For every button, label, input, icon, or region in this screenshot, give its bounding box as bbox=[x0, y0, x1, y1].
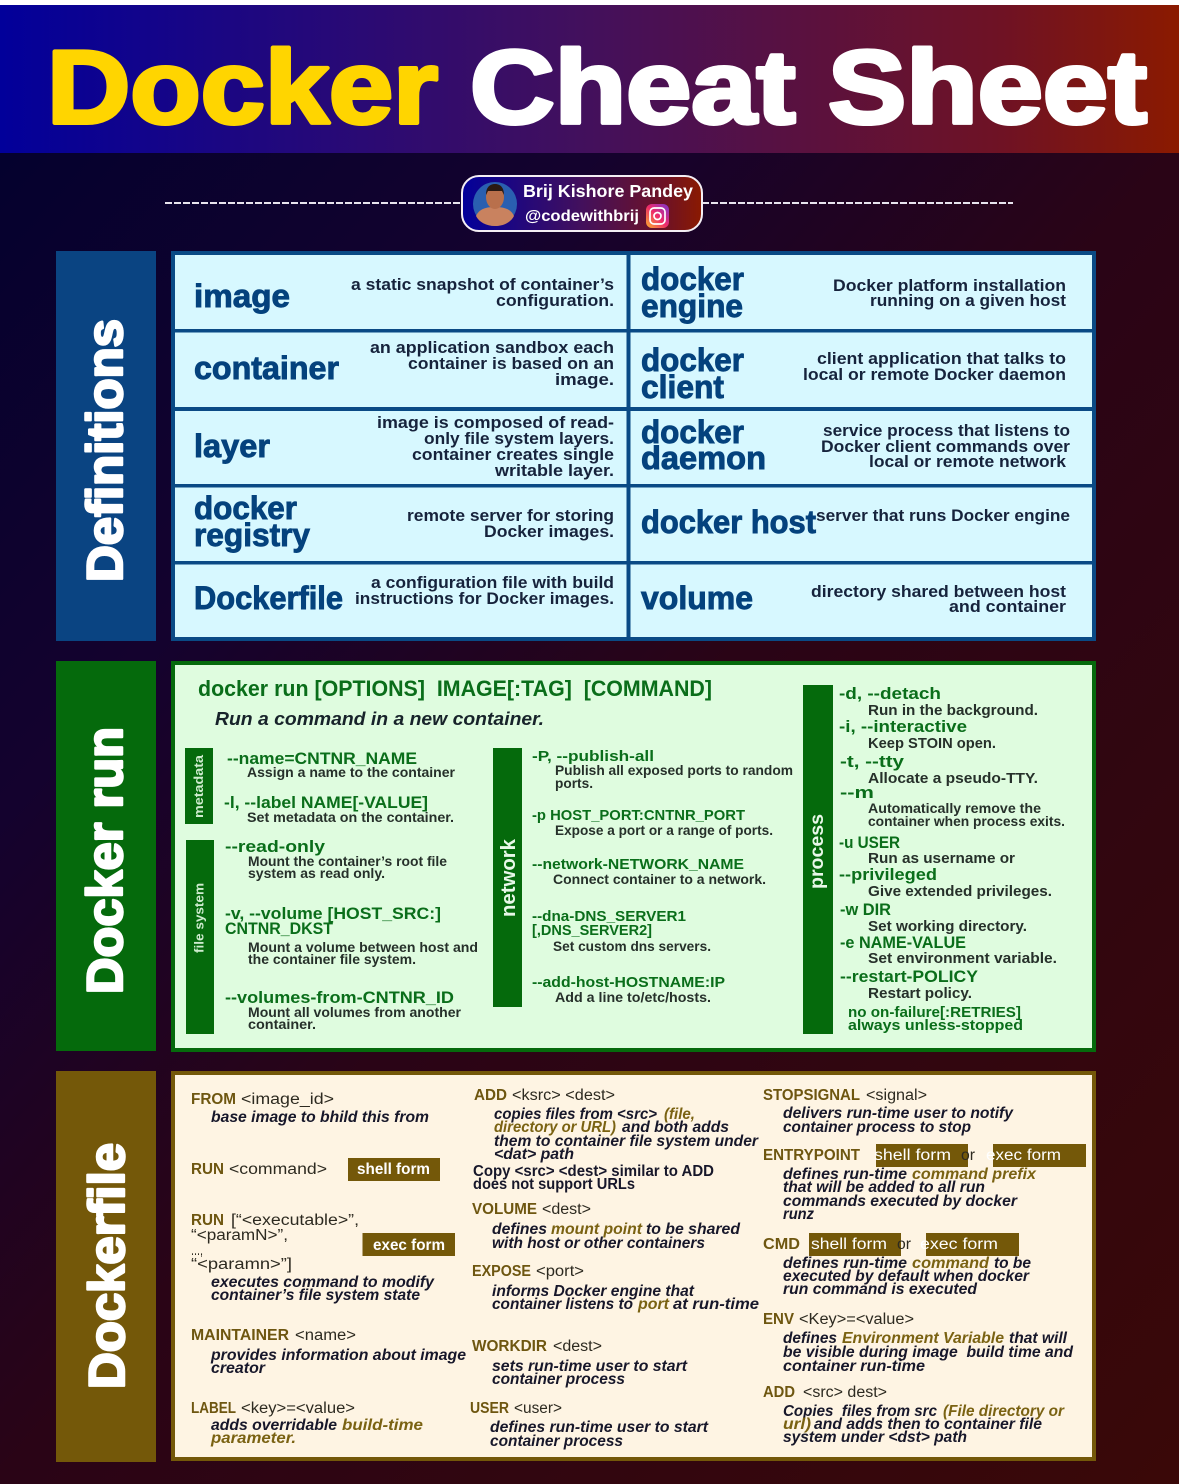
definition: image: configuration. bbox=[496, 291, 614, 310]
definition: layer: image is composed of read- bbox=[377, 413, 614, 432]
directive: VOLUME bbox=[472, 1201, 741, 1252]
category tab: process: process bbox=[807, 814, 828, 889]
option: network: Connect container to a network. bbox=[553, 871, 766, 887]
directive: ADD and COPY: (file, bbox=[664, 1106, 695, 1123]
option: tty: Allocate a pseudo-TTY. bbox=[868, 770, 1038, 787]
category tab: network bbox=[493, 748, 522, 1007]
directive: STOPSIGNAL bbox=[763, 1087, 1014, 1136]
directive: FROM: FROM bbox=[191, 1091, 236, 1108]
directive: LABEL: LABEL bbox=[191, 1400, 236, 1417]
directive: RUN shell form bbox=[191, 1158, 440, 1181]
option: name: Assign a name to the container bbox=[247, 764, 456, 780]
directive: USER: <user> bbox=[514, 1400, 562, 1417]
option: privileged: Give extended privileges. bbox=[868, 883, 1052, 900]
definitions table frame bbox=[171, 251, 1096, 641]
header banner with title: Cheat Sheet bbox=[470, 30, 1147, 146]
definition: docker client: client bbox=[641, 369, 724, 405]
directive: CMD bbox=[763, 1233, 1031, 1298]
option: read-only: system as read only. bbox=[248, 865, 385, 881]
category tab: metadata: metadata bbox=[192, 754, 206, 818]
directive: ENTRYPOINT bbox=[763, 1144, 1086, 1223]
directive: WORKDIR: WORKDIR bbox=[472, 1338, 547, 1355]
option: volumes-from bbox=[225, 989, 462, 1032]
option: restart: --restart-POLICY bbox=[840, 968, 978, 986]
directive: ENTRYPOINT: command prefix bbox=[912, 1166, 1037, 1183]
directive: ADD and COPY: Copy <src> <dest> similar to ADD bbox=[473, 1163, 714, 1180]
option: dns bbox=[532, 908, 711, 954]
directive: RUN shell form: <command> bbox=[229, 1161, 327, 1178]
option: publish bbox=[532, 807, 773, 838]
directive: ADD (second) bbox=[763, 1384, 1065, 1446]
definition: docker registry bbox=[194, 490, 614, 553]
option: volume: Mount a volume between host and bbox=[248, 939, 478, 955]
header banner with title: Docker bbox=[47, 30, 438, 146]
definition: Dockerfile: a configuration file with build bbox=[371, 573, 614, 592]
definition: docker daemon: local or remote network bbox=[869, 452, 1067, 471]
category tab: process bbox=[803, 685, 833, 1034]
directive: ADD (second): ADD bbox=[763, 1384, 795, 1401]
panel: docker run bbox=[56, 661, 1094, 1051]
option: label: -l, --label NAME[-VALUE] bbox=[224, 794, 428, 812]
option: interactive: -i, --interactive bbox=[839, 718, 967, 736]
directive: ENV: container run-time bbox=[783, 1358, 925, 1375]
directive: EXPOSE: <port> bbox=[536, 1263, 584, 1280]
directive: EXPOSE: container listens to bbox=[492, 1296, 633, 1313]
definition: layer bbox=[194, 413, 614, 480]
directive: FROM bbox=[191, 1091, 429, 1126]
author badge: @codewithbrij bbox=[525, 208, 639, 225]
directive: CMD: exec form bbox=[920, 1236, 998, 1253]
option: rm: --m bbox=[840, 784, 874, 802]
directive: FROM: <image_id> bbox=[241, 1091, 334, 1108]
section tab: Dockerfile: Dockerfile bbox=[79, 1143, 135, 1389]
directive: USER bbox=[470, 1400, 709, 1450]
option: interactive: Keep STOIN open. bbox=[868, 735, 996, 752]
directive: WORKDIR: <dest> bbox=[553, 1338, 602, 1355]
option: volumes-from: Mount all volumes from another bbox=[248, 1004, 462, 1020]
definition: volume: directory shared between host bbox=[811, 582, 1066, 601]
directive: RUN exec form: “<paramN>”, bbox=[191, 1227, 288, 1244]
option: privileged: --privileged bbox=[839, 866, 937, 884]
directive: EXPOSE: port bbox=[637, 1296, 670, 1313]
definition: docker engine: docker bbox=[641, 261, 744, 297]
option: label: Set metadata on the container. bbox=[247, 809, 454, 825]
definition: layer: only file system layers. bbox=[424, 429, 614, 448]
option: detach: -d, --detach bbox=[839, 685, 941, 703]
directive: MAINTAINER: provides information about image bbox=[210, 1347, 466, 1364]
option: workdir: -w DIR bbox=[840, 901, 891, 919]
directive: STOPSIGNAL: STOPSIGNAL bbox=[763, 1087, 860, 1104]
directive: LABEL: <key>=<value> bbox=[241, 1400, 355, 1417]
option: volume bbox=[225, 905, 478, 967]
definition: docker client: local or remote Docker daemon bbox=[803, 365, 1066, 384]
definition: layer: writable layer. bbox=[494, 461, 614, 480]
directive: ENTRYPOINT: runz bbox=[783, 1206, 814, 1223]
option: workdir bbox=[840, 901, 1027, 935]
definition: image bbox=[194, 275, 614, 314]
directive: ADD and COPY: directory or URL) bbox=[494, 1119, 616, 1136]
directive: ENTRYPOINT: defines run-time bbox=[783, 1166, 907, 1183]
definition: volume bbox=[641, 580, 1066, 616]
directive: RUN exec form: “<paramn>”] bbox=[191, 1256, 292, 1273]
directive: VOLUME: mount point bbox=[551, 1221, 643, 1238]
directive: STOPSIGNAL: delivers run-time user to notify bbox=[783, 1105, 1014, 1122]
category tab: file system: file system bbox=[192, 883, 206, 953]
option: restart: always unless-stopped bbox=[848, 1017, 1023, 1034]
directive: ENV: defines bbox=[783, 1330, 837, 1347]
option: privileged bbox=[839, 866, 1052, 900]
definition: docker host: docker host bbox=[641, 504, 816, 540]
option: name bbox=[227, 750, 456, 780]
directive: ENTRYPOINT: commands executed by docker bbox=[783, 1193, 1018, 1210]
option: env: -e NAME-VALUE bbox=[840, 934, 966, 952]
directive: STOPSIGNAL: container process to stop bbox=[783, 1119, 971, 1136]
definition: image: a static snapshot of container’s bbox=[351, 275, 614, 294]
directive: ADD and COPY: ADD bbox=[474, 1087, 507, 1104]
panel: dockerfile bbox=[56, 1071, 1094, 1462]
directive: RUN shell form: RUN bbox=[191, 1161, 224, 1178]
directive: VOLUME: with host or other containers bbox=[492, 1235, 705, 1252]
option: publish-all: -P, --publish-all bbox=[532, 748, 654, 765]
directive: FROM: base image to bhild this from bbox=[211, 1109, 429, 1126]
definition: layer: layer bbox=[194, 428, 270, 464]
directive: ENTRYPOINT: ENTRYPOINT bbox=[763, 1147, 861, 1164]
option: name: --name=CNTNR_NAME bbox=[227, 750, 417, 768]
option: user bbox=[839, 834, 1015, 867]
directive: USER: defines run-time user to start bbox=[490, 1419, 709, 1436]
definition: docker registry: registry bbox=[194, 517, 310, 553]
directive: WORKDIR: sets run-time user to start bbox=[492, 1358, 688, 1375]
definition: container: an application sandbox each bbox=[370, 338, 614, 357]
directive: ENV: ENV bbox=[763, 1311, 795, 1328]
option: add-host: Add a line to/etc/hosts. bbox=[555, 989, 711, 1005]
directive: USER: USER bbox=[470, 1400, 509, 1417]
option: restart bbox=[840, 968, 1023, 1034]
directive: ADD and COPY: <ksrc> <dest> bbox=[512, 1087, 615, 1104]
definition: container: image. bbox=[555, 370, 614, 389]
option: network bbox=[532, 856, 766, 887]
panel: definitions bbox=[56, 251, 1096, 641]
directive: CMD: run command is executed bbox=[783, 1281, 978, 1298]
option: restart: no on-failure[:RETRIES] bbox=[848, 1004, 1021, 1021]
directive: ENTRYPOINT: exec form bbox=[986, 1147, 1061, 1164]
directive: RUN shell form: shell form bbox=[357, 1161, 430, 1178]
option: dns: [,DNS_SERVER2] bbox=[532, 922, 652, 939]
category tab: file system bbox=[186, 840, 214, 1034]
definition: Dockerfile: instructions for Docker images. bbox=[355, 589, 614, 608]
option: read-only bbox=[225, 838, 447, 881]
definition: docker engine bbox=[641, 261, 1066, 324]
option: publish-all bbox=[532, 748, 793, 791]
directive: VOLUME: <dest> bbox=[542, 1201, 591, 1218]
definition: docker host bbox=[641, 504, 1070, 540]
definition: docker registry: Docker images. bbox=[484, 522, 614, 541]
definition: docker daemon: Docker client commands over bbox=[821, 437, 1070, 456]
directive: EXPOSE: EXPOSE bbox=[472, 1263, 531, 1280]
definition: docker registry: docker bbox=[194, 490, 297, 526]
option: dns: --dna-DNS_SERVER1 bbox=[532, 908, 686, 925]
section tab: Definitions bbox=[56, 251, 156, 641]
directive: MAINTAINER bbox=[191, 1327, 466, 1377]
option: interactive bbox=[839, 718, 996, 752]
directive: LABEL bbox=[191, 1400, 423, 1447]
option: user: Run as username or bbox=[868, 850, 1015, 867]
definition: layer: container creates single bbox=[412, 445, 614, 464]
command description: Run a command in a new container. bbox=[215, 708, 544, 729]
option: rm: Automatically remove the bbox=[868, 800, 1041, 816]
option: workdir: Set working directory. bbox=[868, 918, 1027, 935]
directive: LABEL: adds overridable bbox=[211, 1417, 337, 1434]
directive: LABEL: parameter. bbox=[210, 1430, 296, 1447]
directive: MAINTAINER: <name> bbox=[295, 1327, 356, 1344]
directive: ADD and COPY: and both adds bbox=[622, 1119, 729, 1136]
directive: WORKDIR bbox=[472, 1338, 688, 1388]
definition: docker client: client application that talks to bbox=[817, 349, 1066, 368]
author badge: Brij Kishore Pandey bbox=[523, 181, 693, 201]
option: label bbox=[224, 794, 454, 825]
definition: docker daemon bbox=[641, 414, 1070, 476]
option: read-only: --read-only bbox=[225, 838, 326, 856]
definition: docker client bbox=[641, 342, 1066, 405]
definition: docker registry: remote server for storing bbox=[407, 506, 614, 525]
definition: volume: and container bbox=[949, 597, 1066, 616]
directive: ADD and COPY: does not support URLs bbox=[473, 1176, 635, 1193]
definition: docker engine: Docker platform installation bbox=[833, 276, 1066, 295]
option: rm: container when process exits. bbox=[868, 813, 1065, 829]
section tab: Docker run bbox=[56, 661, 156, 1051]
directive: VOLUME: to be shared bbox=[646, 1221, 741, 1238]
directive: CMD: command bbox=[912, 1255, 990, 1272]
directive: RUN exec form: RUN bbox=[191, 1212, 224, 1229]
directive: RUN exec form: exec form bbox=[373, 1237, 445, 1254]
option: publish: Expose a port or a range of ports. bbox=[555, 822, 773, 838]
directive: ENTRYPOINT: that will be added to all run bbox=[783, 1179, 985, 1196]
section tab: Dockerfile bbox=[56, 1071, 156, 1462]
directive: RUN exec form: [“<executable>”, bbox=[231, 1212, 359, 1229]
definition: docker engine: running on a given host bbox=[870, 291, 1066, 310]
directive: ENV: <Key>=<value> bbox=[799, 1311, 914, 1328]
option: volumes-from: container. bbox=[248, 1016, 316, 1032]
directive: EXPOSE: at run-time bbox=[673, 1296, 759, 1313]
directive: CMD: executed by default when docker bbox=[783, 1268, 1030, 1285]
definition: docker host: server that runs Docker engine bbox=[816, 506, 1070, 525]
directive: ENV bbox=[763, 1311, 1074, 1375]
option: tty bbox=[840, 753, 1038, 787]
option: env: Set environment variable. bbox=[868, 950, 1057, 967]
directive: ADD (second): (File directory or bbox=[943, 1403, 1065, 1420]
docker run frame bbox=[173, 663, 1094, 1050]
directive: ADD (second): system under <dst> path bbox=[783, 1429, 967, 1446]
option: read-only: Mount the container’s root file bbox=[248, 853, 447, 869]
option: publish-all: Publish all exposed ports to random bbox=[555, 762, 793, 778]
directive: VOLUME: defines bbox=[492, 1221, 547, 1238]
directive: CMD: or bbox=[897, 1236, 911, 1253]
option: dns: Set custom dns servers. bbox=[553, 938, 711, 954]
definition: container: container is based on an bbox=[408, 354, 614, 373]
option: restart: Restart policy. bbox=[868, 985, 972, 1002]
directive: RUN exec form: executes command to modify bbox=[211, 1274, 435, 1291]
definition: docker engine: engine bbox=[641, 288, 743, 324]
command syntax heading: docker run [OPTIONS] IMAGE[:TAG] [COMMAND] bbox=[198, 676, 712, 701]
author badge bbox=[165, 176, 1013, 231]
directive: ENV: that will bbox=[1009, 1330, 1068, 1347]
definition: volume: volume bbox=[641, 580, 753, 616]
directive: MAINTAINER: creator bbox=[211, 1360, 266, 1377]
definition: docker client: docker bbox=[641, 342, 744, 378]
directive: VOLUME: VOLUME bbox=[472, 1201, 537, 1218]
directive: RUN exec form bbox=[191, 1212, 455, 1304]
directive: ENV: Environment Variable bbox=[842, 1330, 1004, 1347]
directive: ADD (second): and adds then to container file bbox=[814, 1416, 1042, 1433]
directive: RUN exec form: container’s file system state bbox=[211, 1287, 420, 1304]
option: detach bbox=[839, 685, 1038, 719]
definition: docker daemon: docker bbox=[641, 414, 744, 450]
option: add-host bbox=[532, 974, 725, 1005]
directive: EXPOSE: informs Docker engine that bbox=[492, 1283, 695, 1300]
directive: ADD and COPY: <dat> path bbox=[494, 1146, 574, 1163]
directive: ADD (second): <src> dest> bbox=[803, 1384, 887, 1401]
definition: Dockerfile: Dockerfile bbox=[194, 580, 343, 616]
option: publish-all: ports. bbox=[555, 775, 593, 791]
directive: RUN exec form: ..., bbox=[191, 1242, 203, 1259]
directive: ADD (second): url) bbox=[783, 1416, 811, 1433]
dockerfile frame bbox=[173, 1073, 1094, 1459]
directive: CMD: shell form bbox=[811, 1236, 887, 1253]
definition: docker daemon: service process that listens to bbox=[823, 421, 1070, 440]
option: volumes-from: --volumes-from-CNTNR_ID bbox=[225, 989, 454, 1007]
directive: LABEL: build-time bbox=[342, 1417, 423, 1434]
directive: ENTRYPOINT: shell form bbox=[874, 1147, 951, 1164]
option: env bbox=[840, 934, 1057, 967]
header banner with title bbox=[0, 5, 1179, 153]
directive: CMD: defines run-time bbox=[783, 1255, 907, 1272]
directive: CMD: to be bbox=[994, 1255, 1031, 1272]
category tab: metadata bbox=[185, 748, 213, 824]
directive: EXPOSE bbox=[472, 1263, 759, 1313]
directive: WORKDIR: container process bbox=[492, 1371, 625, 1388]
section tab: Docker run: Docker run bbox=[77, 727, 133, 994]
definition: image: image bbox=[194, 278, 290, 314]
directive: USER: container process bbox=[490, 1433, 623, 1450]
directive: ENV: be visible during image build time and bbox=[783, 1344, 1074, 1361]
option: volume: -v, --volume [HOST_SRC:] bbox=[225, 905, 441, 923]
option: volume: CNTNR_DKST bbox=[225, 920, 333, 938]
directive: ADD and COPY: them to container file system under bbox=[494, 1133, 759, 1150]
directive: ADD and COPY bbox=[473, 1087, 759, 1193]
directive: CMD: CMD bbox=[763, 1236, 800, 1253]
directive: ADD (second): Copies files from src bbox=[783, 1403, 937, 1420]
option: rm bbox=[840, 784, 1065, 829]
category tab: network: network bbox=[498, 838, 520, 917]
section tab: Definitions: Definitions bbox=[77, 319, 133, 582]
option: add-host: --add-host-HOSTNAME:IP bbox=[532, 974, 725, 991]
definition: docker daemon: daemon bbox=[641, 440, 766, 476]
option: detach: Run in the background. bbox=[868, 702, 1038, 719]
option: tty: -t, --tty bbox=[840, 753, 905, 771]
option: network: --network-NETWORK_NAME bbox=[532, 856, 744, 873]
option: user: -u USER bbox=[839, 834, 900, 852]
directive: STOPSIGNAL: <signal> bbox=[866, 1087, 927, 1104]
definition: Dockerfile bbox=[194, 573, 614, 616]
directive: ADD and COPY: copies files from <src> bbox=[494, 1106, 657, 1123]
option: volume: the container file system. bbox=[248, 951, 416, 967]
definition: container: container bbox=[194, 350, 339, 386]
option: publish: -p HOST_PORT:CNTNR_PORT bbox=[532, 807, 745, 824]
directive: ENTRYPOINT: or bbox=[961, 1147, 975, 1164]
directive: MAINTAINER: MAINTAINER bbox=[191, 1327, 289, 1344]
definition: container bbox=[194, 338, 614, 389]
